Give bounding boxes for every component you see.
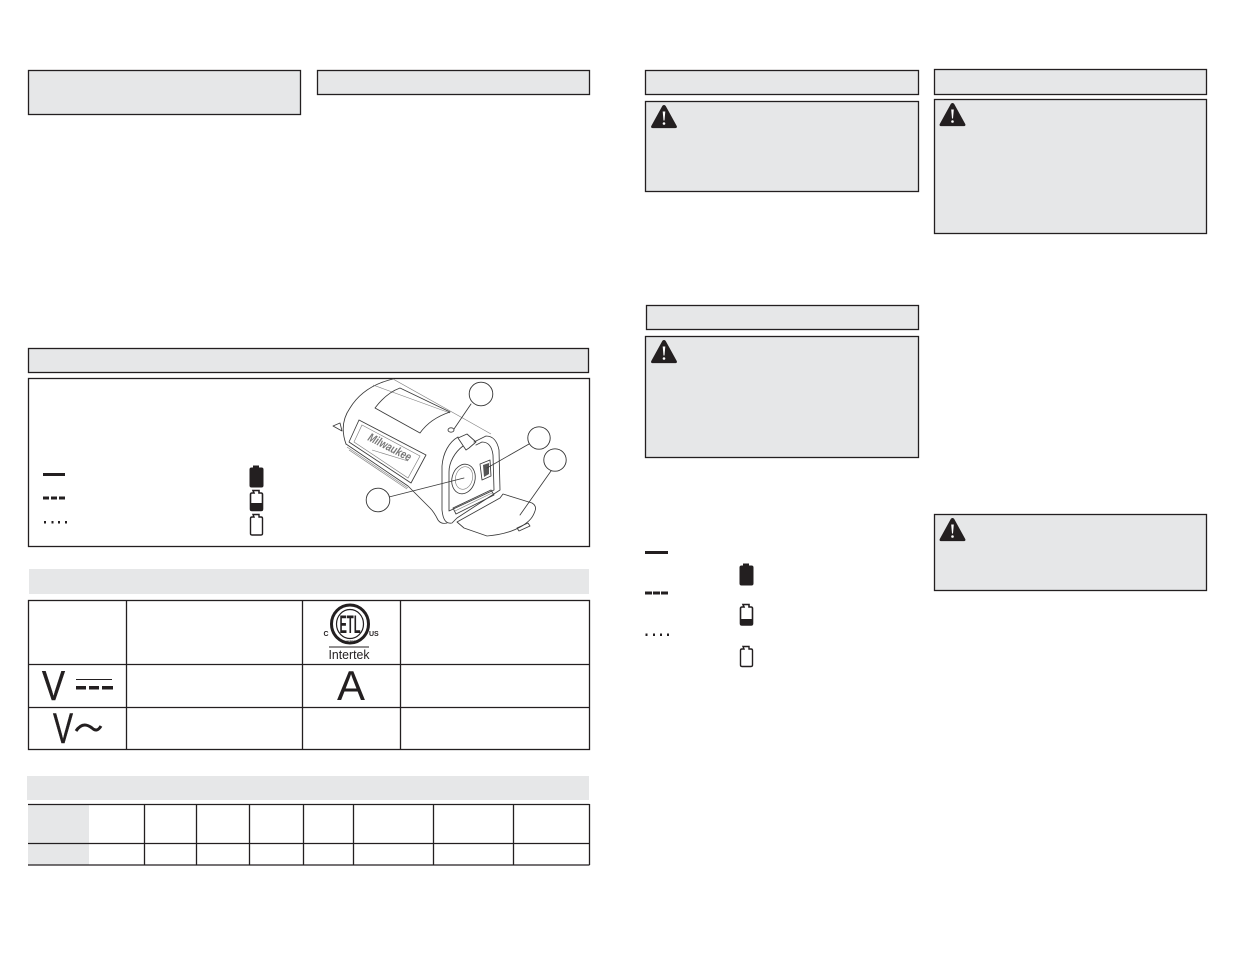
heading band: specifications: [27, 776, 589, 800]
hinge: [453, 490, 494, 514]
heading panel: top middle: [318, 70, 590, 94]
icon: battery full: [740, 564, 754, 586]
front frame: [442, 436, 500, 523]
icon: volts AC: V: [53, 705, 73, 753]
icon: volts AC: [53, 705, 101, 753]
legend: status line samples: [43, 473, 67, 524]
callout 3: [520, 449, 566, 515]
heading band: symbology: [29, 569, 589, 594]
icon: volts DC: [42, 662, 113, 709]
panel: warning box 2: [934, 100, 1206, 234]
icon: warning triangle: [940, 518, 965, 541]
lens: [449, 462, 478, 496]
icon: volts DC: V: [42, 662, 65, 709]
panel: warning box 1: [646, 102, 918, 192]
icon: amps: A: [337, 662, 365, 709]
legend: right status lines: [645, 551, 669, 636]
icon: warning triangle: [940, 103, 965, 126]
panel: heading middle right: [646, 306, 918, 330]
panel: warning box 3: [646, 336, 918, 458]
table: symbols: [28, 600, 590, 753]
USB port: [480, 460, 491, 480]
button and tab: [448, 428, 476, 450]
callout 1: [454, 382, 493, 429]
icon: battery half: [740, 604, 753, 625]
icon: battery full: [250, 466, 264, 488]
battery door: [457, 494, 536, 536]
side label plate with logo: Milwaukee: [366, 430, 414, 464]
side label plate with logo: [347, 420, 426, 489]
panel: heading right column 2: [934, 70, 1206, 94]
body outline: [333, 379, 491, 523]
panel: warning box 4: [934, 514, 1206, 590]
icon: battery empty: [250, 514, 262, 535]
heading panel: functional description: [28, 348, 588, 372]
icon: battery empty: [740, 646, 752, 666]
icon: ETL listed mark: LISTED: [344, 640, 357, 644]
icon: warning triangle: [651, 105, 677, 128]
icon: ETL listed mark: C: [324, 631, 329, 638]
icon: ETL listed mark: Intertek: [328, 648, 370, 662]
panel: product diagram and legend: [28, 378, 590, 546]
top panel: [375, 388, 450, 433]
callout 4: [366, 478, 464, 512]
heading panel: top left: [28, 70, 300, 114]
icon: battery half: [250, 490, 263, 511]
illustration: work light with callouts: [333, 379, 566, 536]
icon: warning triangle: [651, 340, 677, 363]
icon: ETL listed mark: ETL: [340, 611, 360, 639]
icon: ETL listed mark: [324, 605, 379, 662]
table: specifications: [28, 804, 590, 865]
panel: heading right column 1: [646, 70, 918, 94]
callout 2: [487, 427, 550, 468]
icon: ETL listed mark: US: [369, 631, 379, 638]
